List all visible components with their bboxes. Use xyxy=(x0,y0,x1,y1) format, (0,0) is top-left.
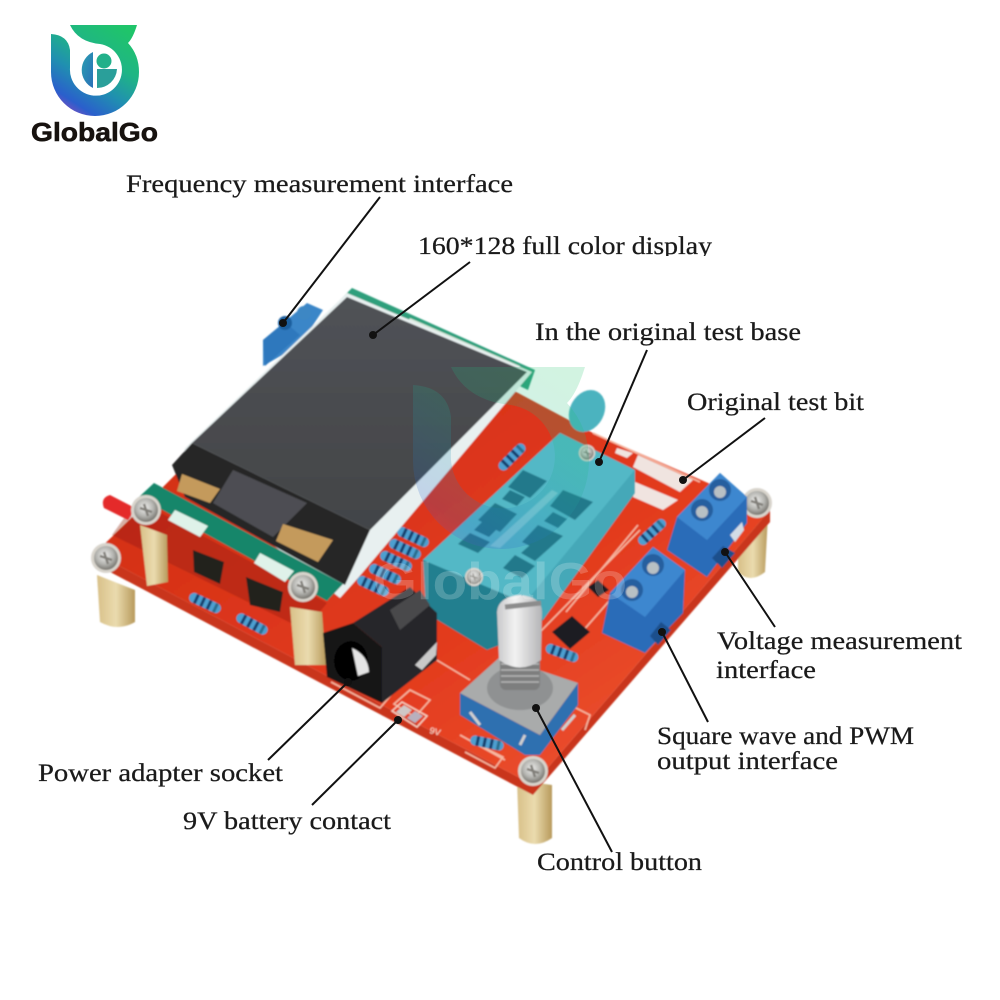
display glass frame xyxy=(178,293,532,598)
green back board with pads xyxy=(340,288,535,390)
label: 160*128 display: 160*128 full color display xyxy=(418,231,712,260)
label: square wave output: Square wave and PWM xyxy=(657,721,914,750)
label: square wave output xyxy=(657,721,914,775)
label: original test bit: Original test bit xyxy=(687,387,864,416)
watermark logo xyxy=(373,367,627,611)
watermark wordmark: GlobalGo xyxy=(373,553,627,611)
blue terminal: frequency interface xyxy=(263,303,323,366)
leader: square wave xyxy=(658,628,708,722)
logo xyxy=(31,25,158,147)
white test pads xyxy=(615,448,693,510)
resistors xyxy=(187,441,668,751)
knob shaft xyxy=(497,595,542,668)
label: square wave output: output interface xyxy=(657,746,838,775)
label: voltage measurement interface xyxy=(716,626,962,684)
label: control button: Control button xyxy=(537,847,702,876)
tan clips xyxy=(177,474,333,562)
leader: test base xyxy=(595,350,647,466)
label: power adapter socket: Power adapter socket xyxy=(38,758,283,787)
label: voltage measurement interface: interface xyxy=(716,655,816,684)
DC power jack xyxy=(323,587,437,703)
blue terminal: voltage xyxy=(667,473,747,577)
leader: display xyxy=(369,262,470,339)
transistors under display xyxy=(193,550,283,612)
green front strip xyxy=(139,483,343,601)
shadow under display board xyxy=(112,500,327,630)
9V battery pads xyxy=(392,702,442,738)
logo mark xyxy=(51,25,139,116)
red PCB edge xyxy=(95,510,770,795)
blue terminal: square wave xyxy=(602,547,685,653)
leader: power xyxy=(268,678,352,760)
leader: 9V xyxy=(312,716,402,805)
logo wordmark: GlobalGo xyxy=(31,117,158,147)
brass leg: left xyxy=(97,575,135,627)
red LED xyxy=(103,495,135,520)
PCB silkscreen outlines xyxy=(331,433,700,768)
label: frequency measurement interface: Frequency measurement interface xyxy=(126,169,513,198)
leader: test bit xyxy=(679,418,765,484)
rotary encoder xyxy=(460,595,578,755)
socket slots xyxy=(458,470,593,578)
brass leg: bottom xyxy=(517,780,552,844)
product photo: tester board xyxy=(91,288,772,844)
leader: frequency xyxy=(279,197,380,327)
small IC chips xyxy=(552,580,609,649)
LCD screen xyxy=(192,297,527,530)
leader: control button xyxy=(532,704,612,852)
front screws and posts xyxy=(91,488,772,786)
green board pads xyxy=(168,510,294,582)
brass leg: right xyxy=(738,515,768,578)
socket center bar xyxy=(490,490,558,548)
label: original test base: In the original test base xyxy=(535,317,801,346)
label: 9V battery contact: 9V battery contact xyxy=(183,806,391,835)
leader: voltage xyxy=(721,548,775,627)
9V battery pads: 9V xyxy=(428,725,442,738)
flex ribbon xyxy=(213,470,307,537)
logo inner emblem xyxy=(82,52,117,88)
blue capacitor xyxy=(562,384,612,438)
watermark mark xyxy=(413,367,589,549)
leader lines xyxy=(268,197,775,852)
label: voltage measurement interface: Voltage measurement xyxy=(717,626,962,655)
label cover: cropped descenders xyxy=(640,256,720,268)
display lower bezel xyxy=(172,443,370,585)
teal ZIF socket xyxy=(423,433,635,650)
red PCB xyxy=(95,330,770,785)
